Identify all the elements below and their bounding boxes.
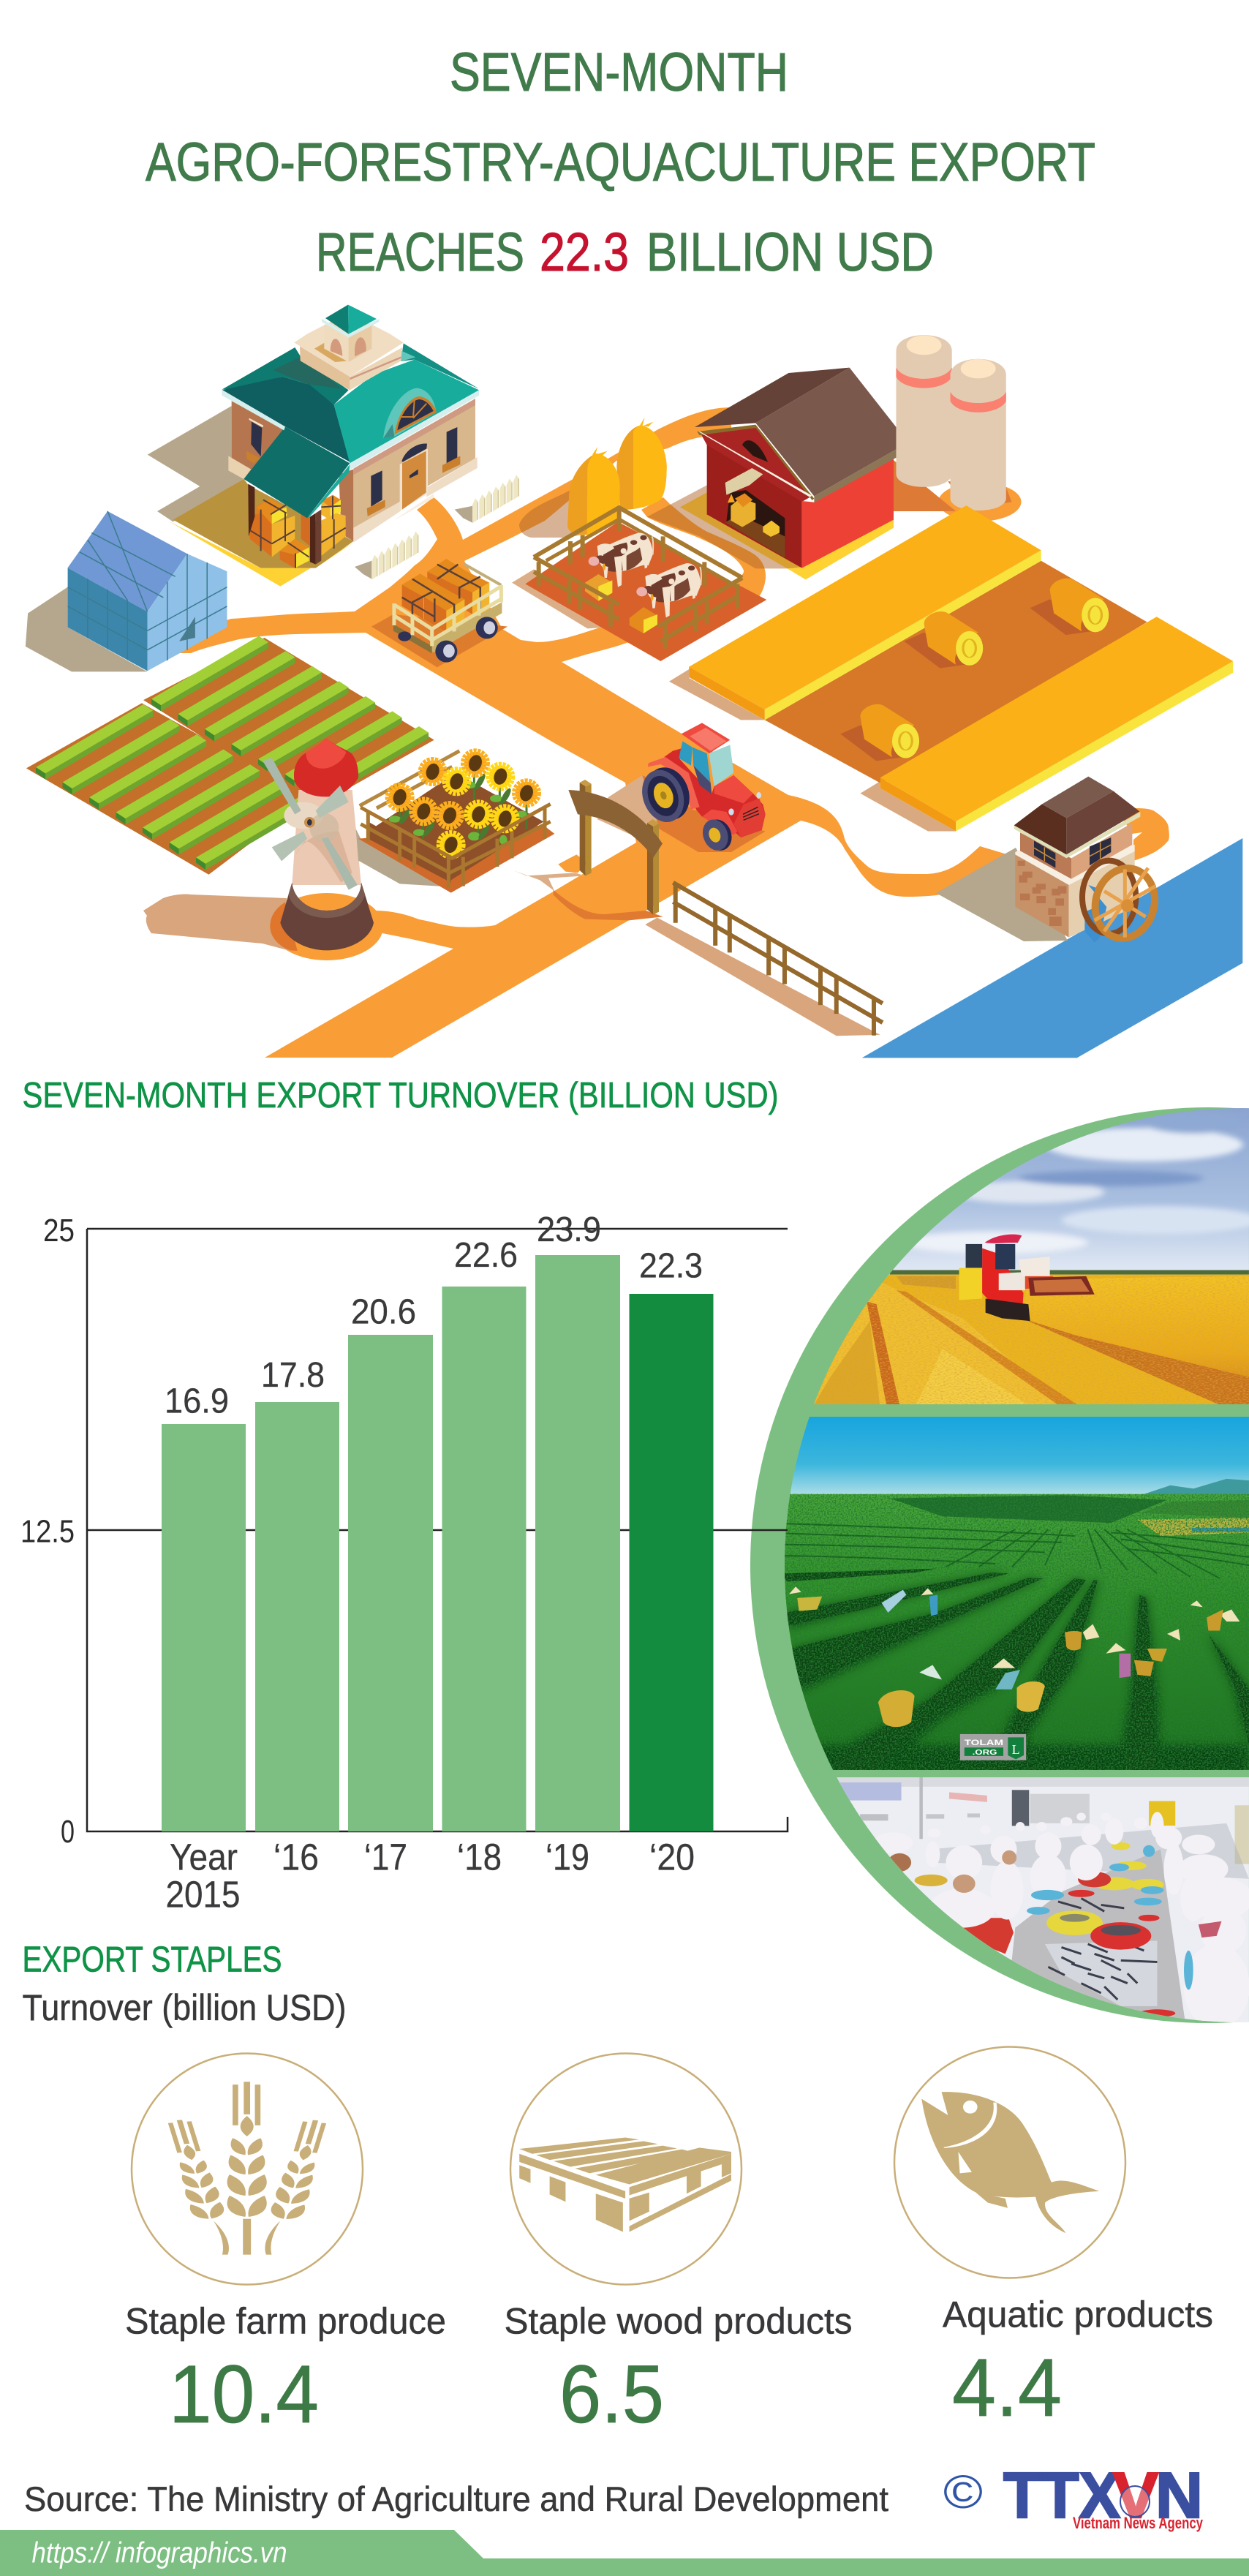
agency wordmark: N xyxy=(1155,2459,1203,2531)
icon: wheat in circle xyxy=(132,2054,363,2285)
silo ground xyxy=(892,459,1021,521)
tolam.org watermark: .ORG xyxy=(973,1749,997,1757)
label: Aquatic products xyxy=(943,2294,1213,2335)
sunflower bed xyxy=(356,751,554,893)
greenhouse xyxy=(26,511,227,671)
x axis labels: ‘20 xyxy=(649,1836,695,1878)
logo: TTXVN xyxy=(943,2459,1204,2532)
source line: Source: The Ministry of Agriculture and Rural Development xyxy=(24,2479,888,2518)
value: 10.4 xyxy=(169,2349,319,2440)
tractor body xyxy=(635,723,766,854)
title: SEVEN-MONTH xyxy=(450,42,788,102)
tolam.org watermark: TOLAM xyxy=(965,1739,1003,1747)
watermill xyxy=(936,777,1162,945)
label: Staple wood products xyxy=(505,2301,853,2342)
x axis labels: ‘17 xyxy=(364,1836,407,1878)
y axis labels: 0 xyxy=(61,1814,75,1850)
bar values: 22.3 xyxy=(639,1246,703,1286)
river xyxy=(862,838,1242,1058)
wooden fence xyxy=(645,883,883,1036)
agency wordmark: V xyxy=(1113,2459,1158,2531)
gate xyxy=(568,780,663,915)
hay trailer xyxy=(371,559,507,667)
green crescent xyxy=(750,1107,1249,2023)
value: 4.4 xyxy=(952,2342,1062,2433)
x axis labels: ‘16 xyxy=(273,1836,319,1878)
section heading: export turnover: SEVEN-MONTH EXPORT TURNOVER (BILLION USD) xyxy=(22,1076,778,1115)
bar values: 23.9 xyxy=(537,1210,601,1249)
title xyxy=(146,42,1095,282)
bar values: 17.8 xyxy=(261,1356,325,1395)
bar values xyxy=(165,1210,703,1420)
footer url: https:// infographics.vn xyxy=(32,2537,287,2569)
illustration: isometric farm xyxy=(26,305,1242,1058)
x axis labels: 2015 xyxy=(165,1874,240,1915)
title: 22.3 xyxy=(540,222,629,282)
roads xyxy=(179,407,1169,1058)
section heading: export staples: EXPORT STAPLES xyxy=(22,1940,282,1979)
subheading: turnover unit: Turnover (billion USD) xyxy=(22,1987,347,2028)
logo globe xyxy=(1120,2486,1150,2517)
icon: pallet in circle xyxy=(510,2054,742,2285)
staple: farm produce xyxy=(125,2054,446,2440)
staple: aquatic products xyxy=(894,2046,1213,2433)
small picket fences xyxy=(355,475,519,580)
hay stacks xyxy=(519,418,667,538)
barn xyxy=(647,368,908,579)
panel: photo semicircle xyxy=(750,1105,1249,2029)
silos xyxy=(896,335,1006,511)
x axis labels: ‘18 xyxy=(457,1836,502,1878)
footer bar xyxy=(0,2530,1249,2576)
windmill xyxy=(143,738,374,951)
agency tagline: Vietnam News Agency xyxy=(1073,2514,1204,2532)
icon: fish in circle xyxy=(894,2046,1125,2278)
bar values: 22.6 xyxy=(454,1236,518,1275)
bars xyxy=(162,1255,714,1831)
chart axes and gridlines xyxy=(87,1229,788,1831)
x axis labels: ‘19 xyxy=(546,1836,589,1878)
hay field xyxy=(669,505,1233,831)
bar chart: export turnover xyxy=(20,1210,788,1915)
tolam.org watermark xyxy=(960,1734,1026,1760)
photo: rice harvest xyxy=(764,1105,1249,2029)
bar values: 20.6 xyxy=(351,1293,416,1331)
vegetable fields xyxy=(26,636,434,875)
gate and tractor xyxy=(513,723,766,920)
title: REACHES xyxy=(316,222,524,282)
title: AGRO-FORESTRY-AQUACULTURE EXPORT xyxy=(146,132,1095,192)
agency wordmark: TTX xyxy=(1003,2459,1120,2531)
y axis labels xyxy=(20,1213,75,1850)
y axis labels: 12.5 xyxy=(20,1514,75,1549)
tolam.org watermark: L xyxy=(1012,1742,1020,1757)
bar values: 16.9 xyxy=(165,1382,229,1420)
x axis labels: Year xyxy=(170,1836,238,1878)
label: Staple farm produce xyxy=(125,2301,446,2342)
title: BILLION USD xyxy=(646,222,934,282)
value: 6.5 xyxy=(559,2349,664,2440)
photo: seafood processing xyxy=(814,1777,1249,2029)
copyright mark: © xyxy=(943,2466,983,2518)
y axis labels: 25 xyxy=(43,1213,75,1249)
photo: tea plantation xyxy=(764,1415,1249,1774)
cow pen xyxy=(512,508,766,661)
staple: wood products xyxy=(505,2054,853,2440)
house xyxy=(148,305,479,587)
agency wordmark xyxy=(1003,2459,1203,2531)
x axis labels xyxy=(165,1836,695,1915)
